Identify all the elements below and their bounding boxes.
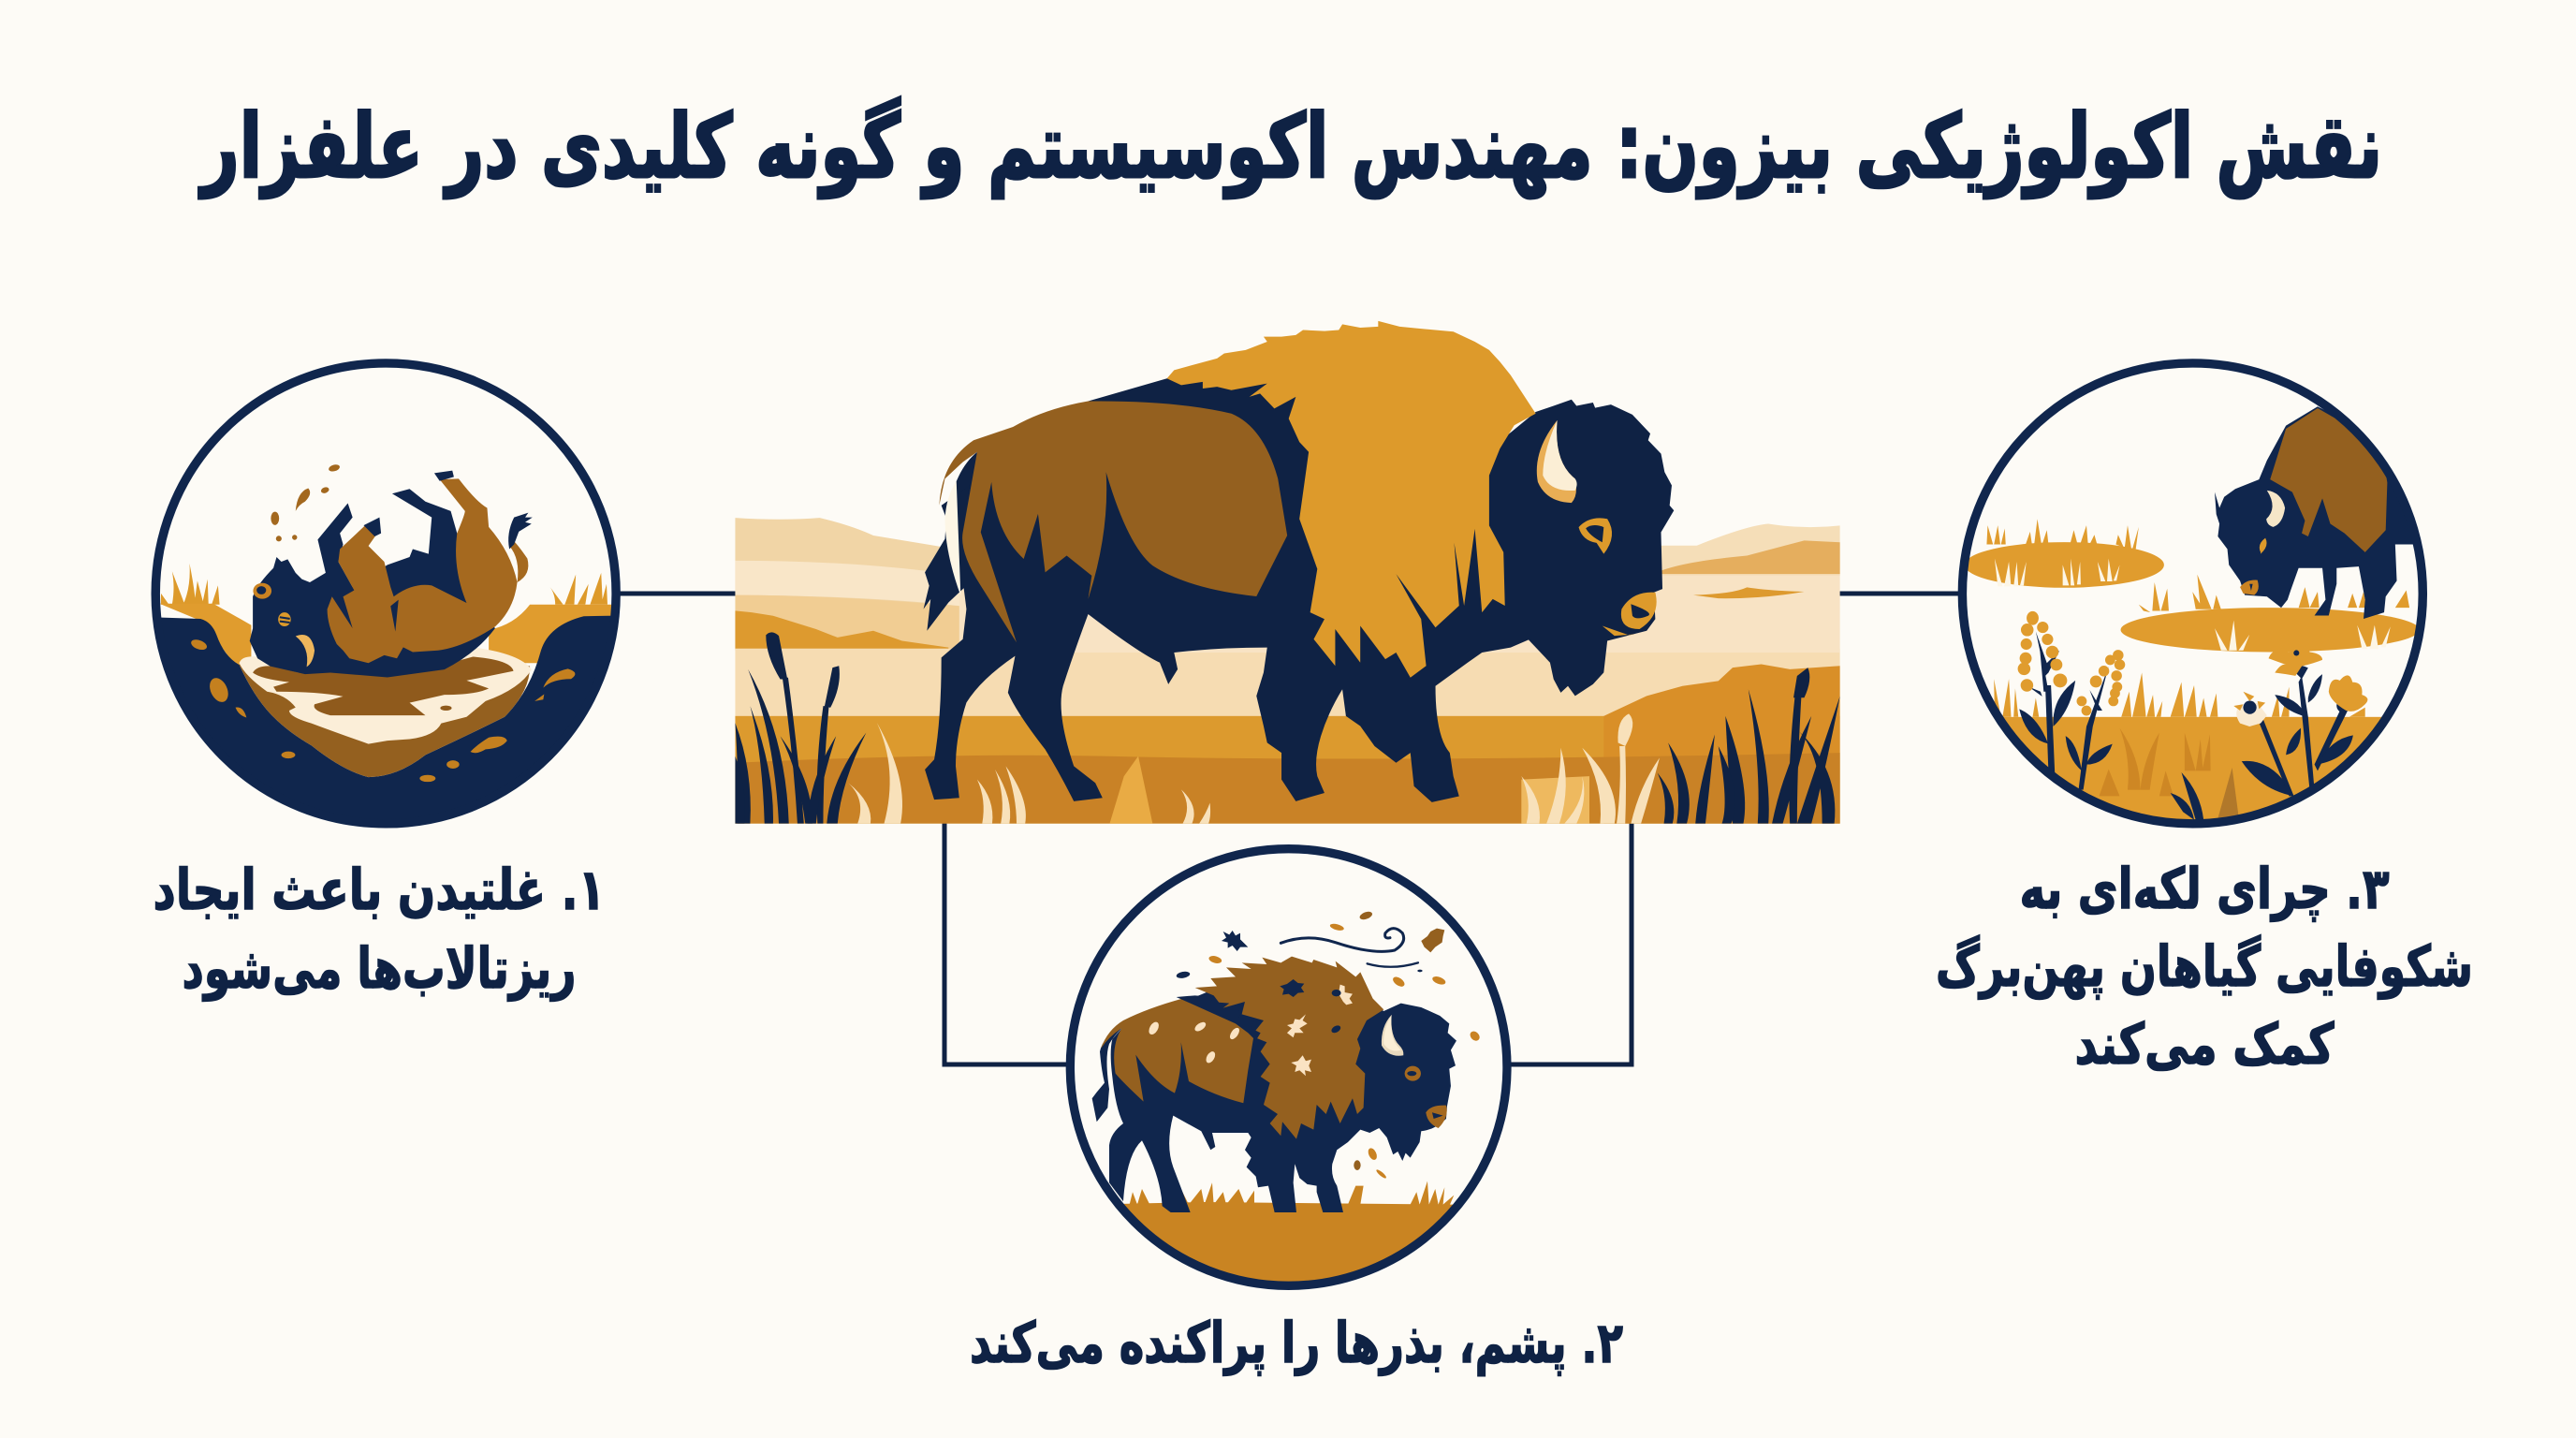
- ground: [1123, 1202, 1453, 1282]
- banks: [159, 604, 615, 667]
- muzzle: [1621, 593, 1657, 629]
- bison face: [1382, 1015, 1403, 1056]
- navy reeds right: [1658, 668, 1840, 824]
- label 1: [154, 858, 605, 1002]
- bison silhouette: [924, 321, 1674, 802]
- hooves: [434, 471, 454, 481]
- label 3: [1936, 857, 2473, 1078]
- panel: patch grazing circle: [1956, 363, 2432, 831]
- ring: [1962, 363, 2422, 824]
- lower meadow patch: [2121, 608, 2420, 652]
- cream tufts: [1995, 559, 2120, 586]
- eye: [2260, 538, 2267, 554]
- muddy water: [253, 657, 514, 715]
- darker grass: [2100, 728, 2211, 796]
- shaggy front: [1195, 957, 1383, 1139]
- golden mane: [1167, 321, 1536, 678]
- rolling bison navy: [250, 489, 495, 678]
- horn: [2266, 491, 2285, 527]
- central illustration: bison in grassland: [735, 321, 1840, 824]
- grazing bison navy: [2215, 406, 2425, 619]
- goldenrod blossoms: [2018, 611, 2125, 715]
- bison tail: [1092, 1028, 1121, 1122]
- ring: [155, 363, 616, 824]
- splashes: [271, 463, 341, 541]
- rolling bison brown: [328, 478, 518, 663]
- navy back gap: [1177, 995, 1261, 1041]
- seeds on fur: [1147, 985, 1353, 1076]
- upper left meadow patch: [1965, 542, 2164, 588]
- upper grass: [1986, 519, 2139, 550]
- body in navy: [925, 378, 1674, 802]
- mud clods: [190, 638, 575, 782]
- brown hindquarter: [939, 401, 1287, 642]
- navy soil: [161, 616, 610, 820]
- navy reeds left: [735, 632, 866, 824]
- prairie landscape background: [735, 518, 1840, 824]
- muzzle: [2240, 580, 2259, 595]
- foreground ground: [2003, 717, 2381, 820]
- eye: [1579, 518, 1612, 554]
- grazing bison brown: [2270, 408, 2387, 552]
- navy plants: [2019, 631, 2353, 820]
- tail: [924, 452, 977, 631]
- burrs in the air: [1222, 931, 1248, 951]
- mud pit: [240, 665, 530, 777]
- wind lines: [1281, 929, 1404, 951]
- horn: [1537, 420, 1576, 503]
- tail: [511, 542, 528, 582]
- label 3: ۳. چرای لکه‌ای به: [2020, 857, 2389, 922]
- ring: [1070, 849, 1507, 1285]
- face details: [253, 583, 271, 599]
- label 2: ۲. پشم، بذرها را پراکنده می‌کند: [970, 1311, 1623, 1376]
- cream tail highlight: [945, 481, 960, 595]
- label 1: ریزتالاب‌ها می‌شود: [182, 936, 577, 1002]
- brown body: [1101, 999, 1254, 1103]
- connector lines: [618, 594, 1961, 1064]
- airborne seeds: [1208, 910, 1482, 1180]
- label 3: کمک می‌کند: [2074, 1012, 2334, 1078]
- grass: [1130, 1181, 1454, 1206]
- label 1: ۱. غلتیدن باعث ایجاد: [154, 858, 605, 923]
- cream grass: [848, 713, 1660, 824]
- bison navy: [1109, 992, 1456, 1212]
- pale water: [240, 647, 532, 744]
- grass tufts: [161, 564, 607, 605]
- panel: wallowing circle: [150, 363, 622, 834]
- wildflowers: [2269, 638, 2322, 676]
- panel: seed dispersal circle: [1064, 849, 1507, 1301]
